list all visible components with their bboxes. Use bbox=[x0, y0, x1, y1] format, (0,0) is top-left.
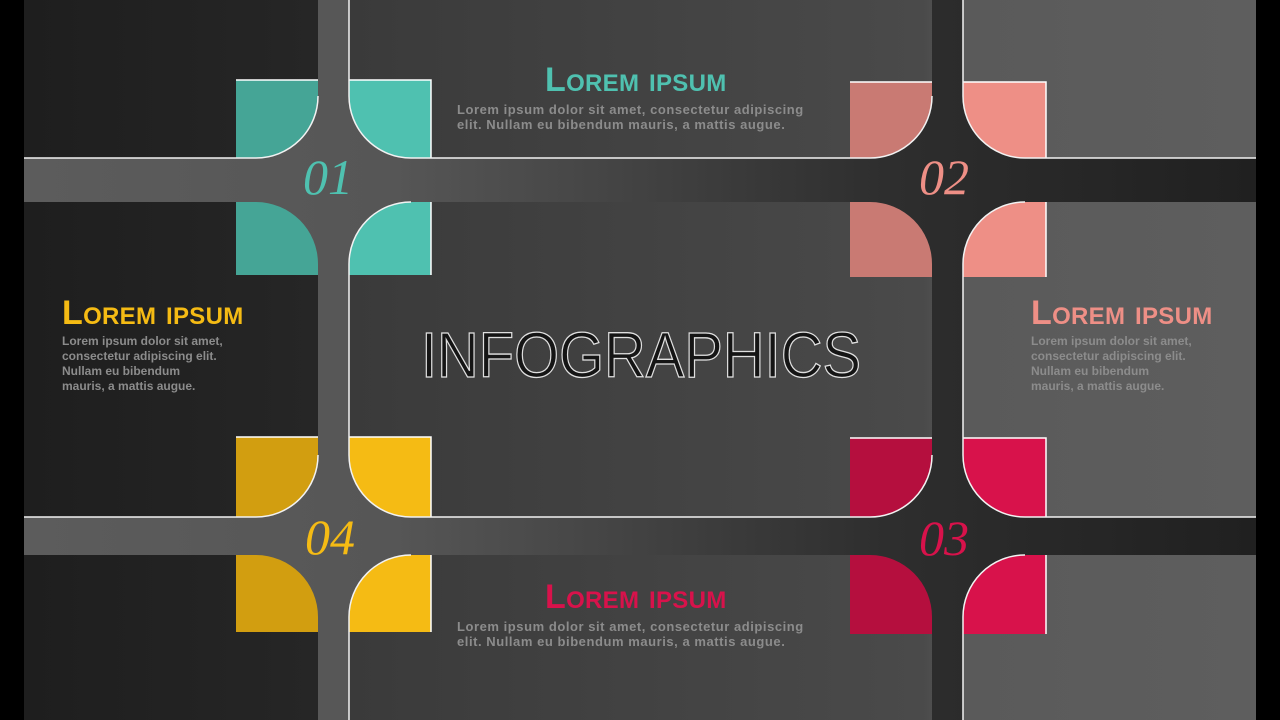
text 02: Lorem ipsum dolor sit amet, bbox=[1031, 334, 1192, 348]
square 02 salmon bbox=[850, 82, 1046, 277]
number 02: 02 bbox=[919, 149, 969, 205]
heading 01: Lorem ipsum bbox=[545, 61, 727, 99]
text 02: consectetur adipiscing elit. bbox=[1031, 349, 1186, 363]
text 01: Lorem ipsum dolor sit amet, consectetur adipiscing bbox=[457, 102, 804, 117]
text 02: Nullam eu bibendum bbox=[1031, 364, 1149, 378]
square 04 yellow bbox=[236, 437, 431, 632]
square 01 teal bbox=[236, 80, 431, 275]
text 01 bbox=[457, 102, 804, 132]
square 03 red bbox=[850, 438, 1046, 634]
heading 02: Lorem ipsum bbox=[1031, 294, 1213, 332]
heading 03: Lorem ipsum bbox=[545, 578, 727, 616]
text 02: mauris, a mattis augue. bbox=[1031, 379, 1164, 393]
heading 04: Lorem ipsum bbox=[62, 294, 244, 332]
text 04: Lorem ipsum dolor sit amet, bbox=[62, 334, 223, 348]
text 03: Lorem ipsum dolor sit amet, consectetur adipiscing bbox=[457, 619, 804, 634]
text 01: elit. Nullam eu bibendum mauris, a mattis augue. bbox=[457, 117, 785, 132]
title: INFOGRAPHICS bbox=[421, 319, 861, 391]
number 03: 03 bbox=[919, 510, 969, 566]
text 04: mauris, a mattis augue. bbox=[62, 379, 195, 393]
text 04: Nullam eu bibendum bbox=[62, 364, 180, 378]
text 03 bbox=[457, 619, 804, 649]
text 02 bbox=[1031, 334, 1192, 393]
number 01: 01 bbox=[303, 149, 353, 205]
text 04: consectetur adipiscing elit. bbox=[62, 349, 217, 363]
number 04: 04 bbox=[305, 509, 355, 565]
text 03: elit. Nullam eu bibendum mauris, a mattis augue. bbox=[457, 634, 785, 649]
text 04 bbox=[62, 334, 223, 393]
